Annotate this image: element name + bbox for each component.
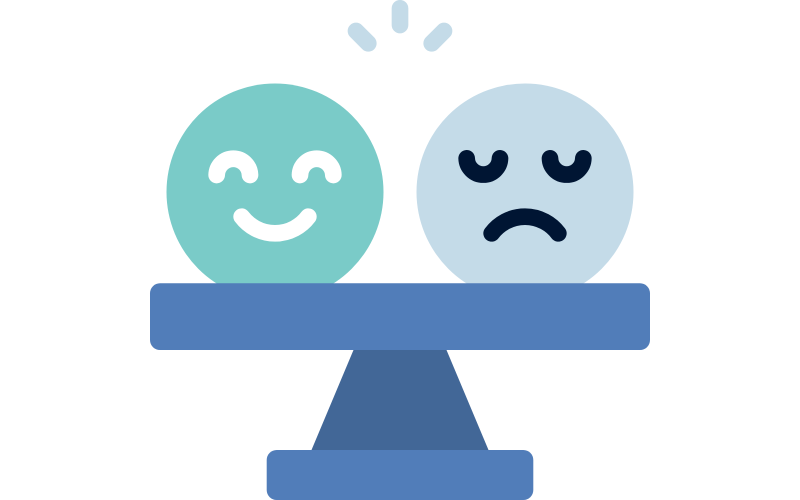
icon: sad face [416, 84, 634, 300]
icon: happy face [166, 84, 384, 300]
balance stand [309, 345, 491, 455]
icon: emphasis rays above the faces [356, 8, 444, 43]
balance beam [150, 283, 650, 350]
sad face circle [416, 84, 634, 300]
sad face features [467, 158, 583, 233]
happy face circle [166, 84, 384, 300]
balance base [267, 450, 533, 500]
happy face features [217, 159, 333, 233]
